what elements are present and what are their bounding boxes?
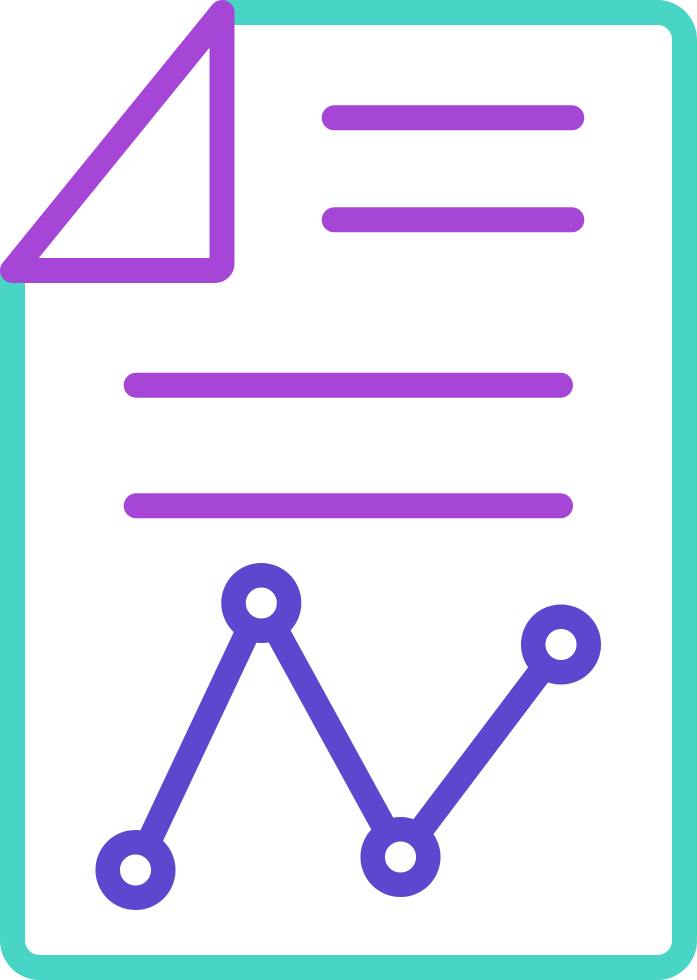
text lines: middle <box>136 385 560 506</box>
line chart <box>108 575 589 898</box>
chart point 4 <box>533 617 589 672</box>
chart point 1 <box>108 842 163 898</box>
text lines: upper right <box>334 118 572 220</box>
chart point 3 <box>373 829 428 885</box>
chart point 2 <box>233 575 289 631</box>
icon: folded corner <box>12 12 222 270</box>
